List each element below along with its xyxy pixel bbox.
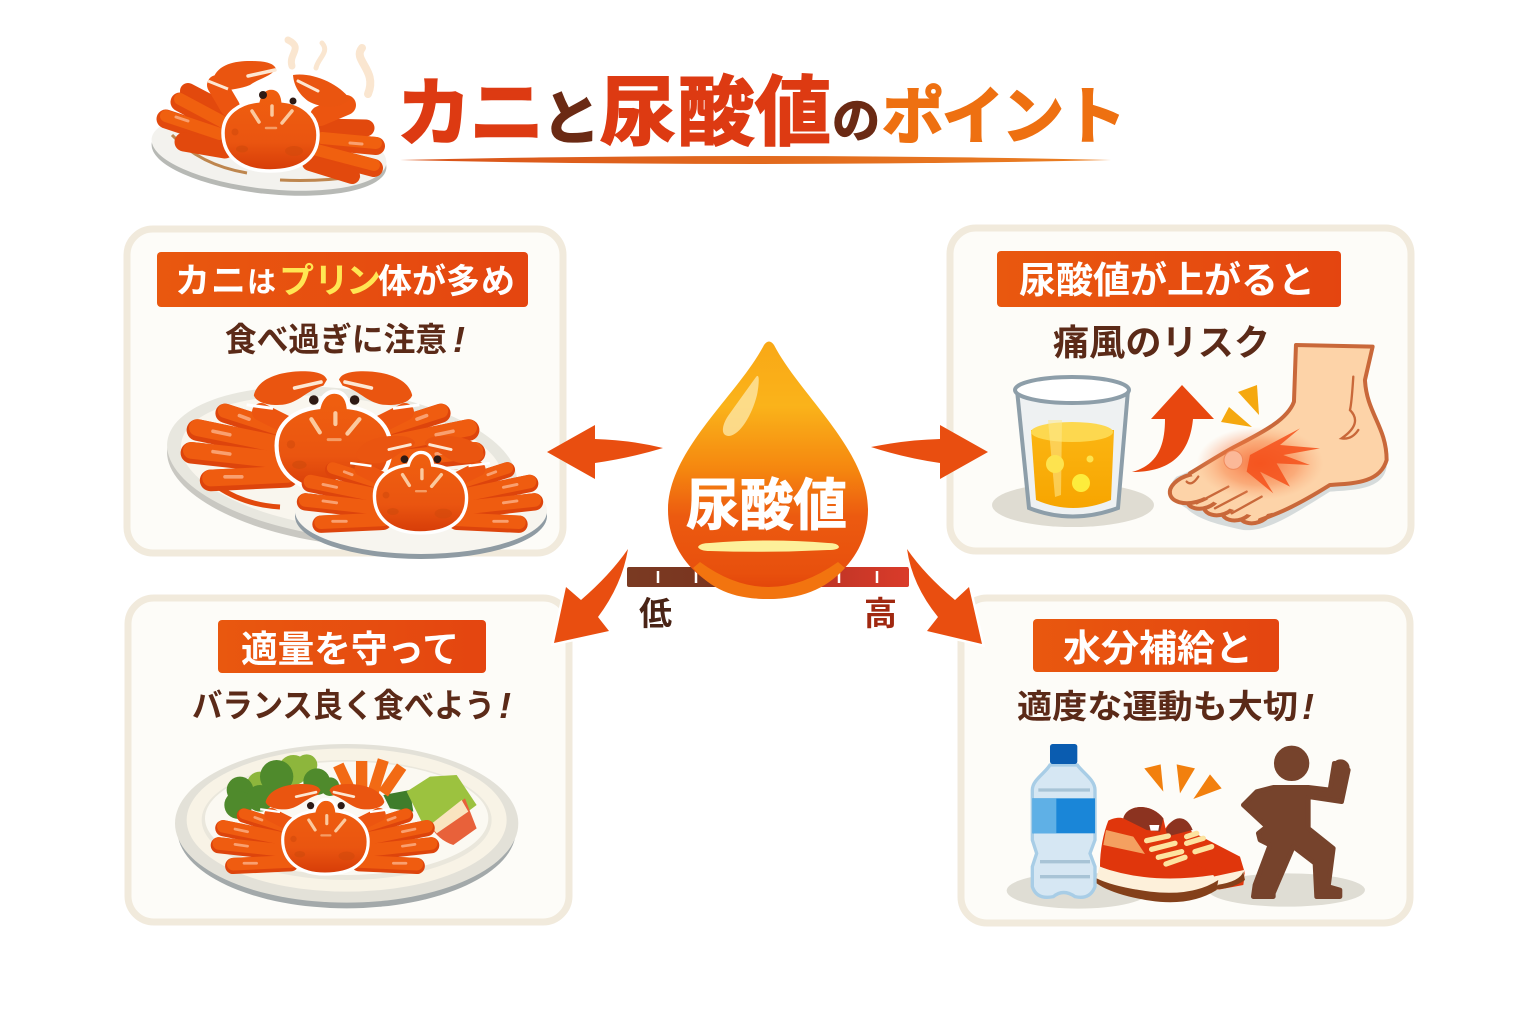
label: high: 高: [864, 595, 897, 632]
heading: hydration: [1033, 619, 1279, 672]
text: balanced eating: !: [499, 685, 511, 726]
icon: leafy greens: [224, 754, 477, 825]
icon: glass of juice: [992, 377, 1154, 527]
title: ポイント: [882, 83, 1126, 152]
title underline: [400, 156, 1111, 164]
central drop: uric acid: 尿酸値: [686, 474, 847, 537]
text: watch overeating: 食べ過ぎに注意: [225, 321, 447, 358]
panel: gout risk: [950, 228, 1411, 551]
heading: purine: は: [247, 267, 276, 299]
heading: purine: [157, 252, 528, 307]
panel: water and exercise: [961, 598, 1410, 923]
illustration: balanced plate: [175, 744, 518, 908]
icon: water bottle: [1032, 744, 1095, 897]
title crab illustration: [148, 40, 390, 206]
shadows: [1007, 873, 1150, 909]
heading: rising uric acid: [997, 251, 1341, 307]
heading: purine: 体が多め: [378, 262, 515, 301]
text: moderate exercise: !: [1302, 686, 1314, 727]
icon: pain marks: [1221, 385, 1259, 427]
title: カニ: [397, 72, 544, 155]
text: gout risk: 痛風のリスク: [1053, 322, 1270, 363]
heading: purine: プリン: [279, 262, 381, 301]
heading: moderation: 適量を守って: [241, 629, 459, 670]
label: low: 低: [639, 595, 672, 632]
heading: hydration: 水分補給と: [1063, 628, 1253, 669]
title: の: [832, 95, 880, 148]
heading: moderation: [218, 620, 486, 673]
icon: exercising figure: [1243, 748, 1348, 897]
arrow: to hydration panel: [907, 549, 982, 644]
panel: eat in moderation: [128, 598, 569, 922]
panel: purine warning: [127, 229, 563, 565]
central drop: uric acid: [668, 342, 868, 599]
text: moderate exercise: 適度な運動も大切: [1017, 688, 1298, 725]
scale bar: low to high: [627, 567, 909, 587]
arrow: to purine panel: [547, 425, 663, 479]
icon: foot with gout: [1167, 345, 1387, 530]
heading: rising uric acid: 尿酸値が上がると: [1019, 260, 1315, 301]
icon: vegetable slice: [430, 798, 477, 845]
icon: motion marks: [1144, 764, 1222, 799]
arrow: rising: [1132, 385, 1214, 472]
illustration: crabs on plates: [158, 368, 547, 565]
icon: carrot sticks: [338, 760, 402, 793]
arrow: to moderation panel: [554, 549, 628, 643]
title: [397, 71, 1126, 156]
text: balanced eating: バランス良く食べよう: [192, 687, 495, 724]
heading: purine: カニ: [175, 262, 246, 301]
title: 尿酸値: [600, 71, 831, 156]
arrow: to gout panel: [871, 425, 988, 479]
icon: running shoes: [1097, 807, 1245, 902]
text: watch overeating: !: [453, 319, 465, 360]
title: と: [542, 87, 600, 152]
